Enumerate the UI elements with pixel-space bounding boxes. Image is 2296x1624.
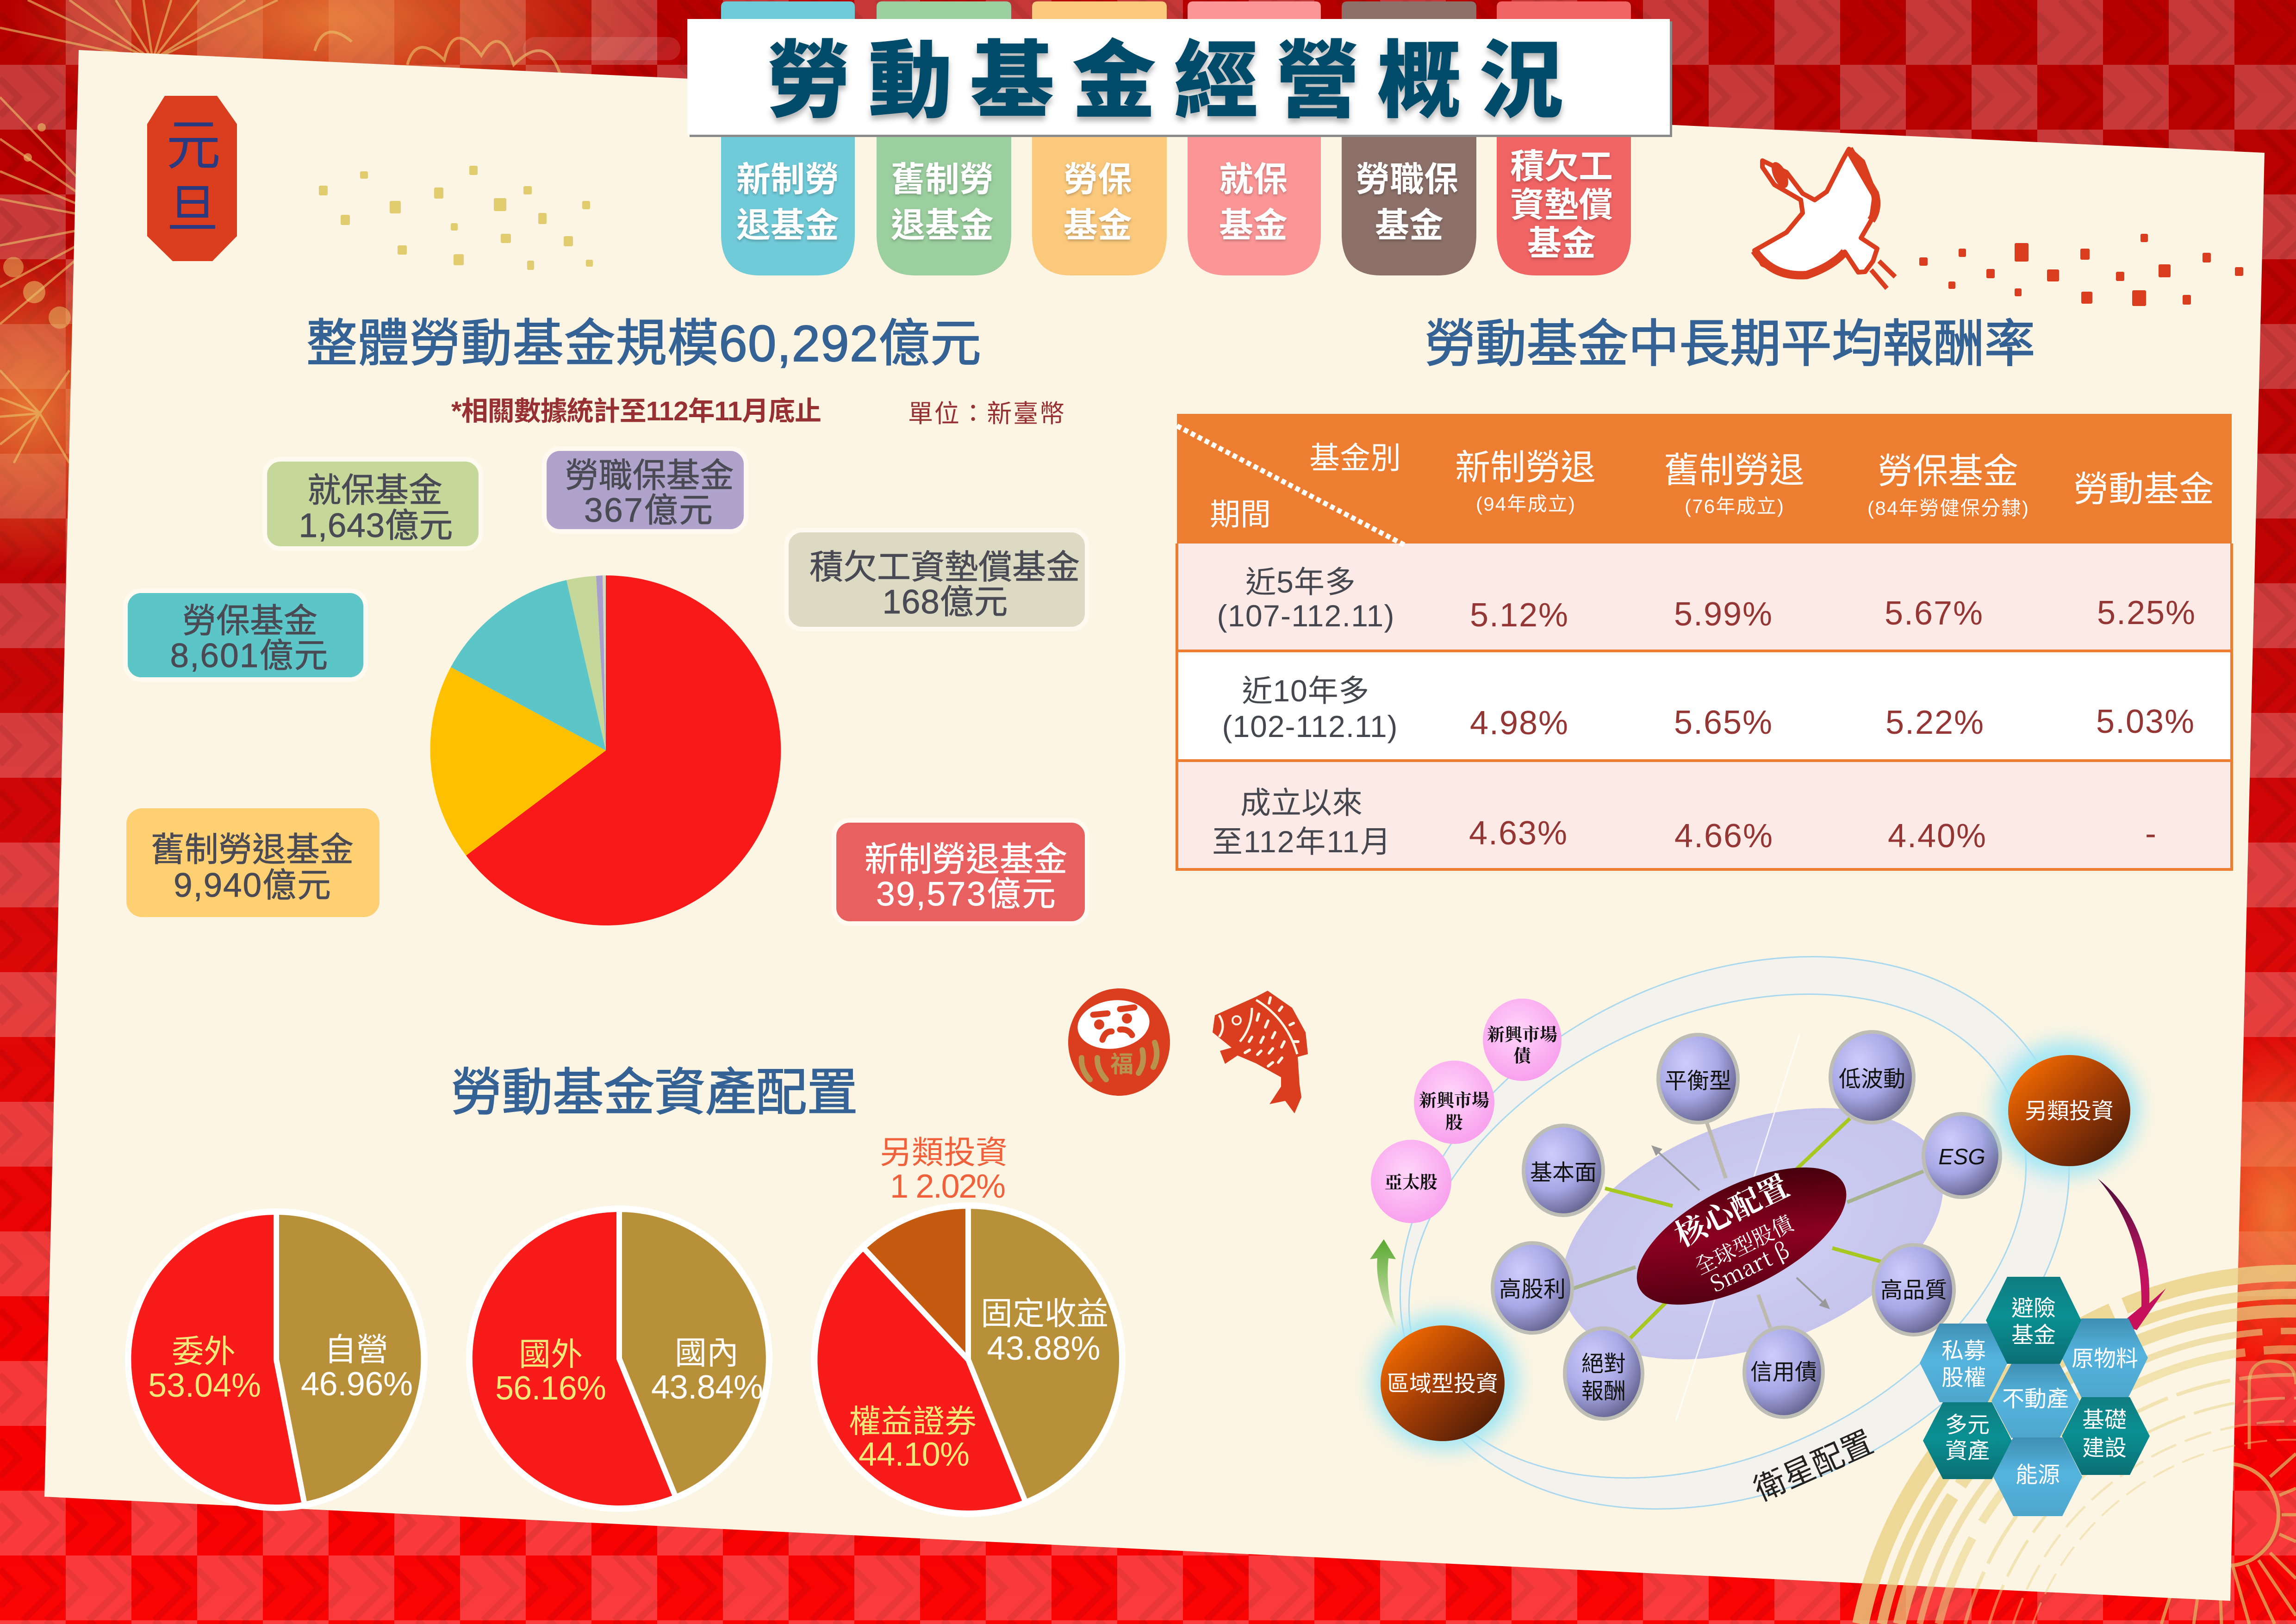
spheres: 基本面 [1530, 1154, 1597, 1187]
table: average returns: 5.03% [2096, 703, 2194, 740]
hexagon cluster: 資產 [1945, 1432, 1990, 1465]
core oval [1617, 1139, 1867, 1333]
satellite ring [1400, 956, 2069, 1509]
spheres: 高品質 [1880, 1272, 1947, 1304]
label: 勞職保基金 [544, 449, 746, 531]
table: average returns: 近5年多 [1245, 565, 1356, 599]
core oval: Smart β [1704, 1232, 1794, 1299]
heading: total fund size: 整體勞動基金規模60,292億元 [306, 315, 981, 372]
pie chart: asset classes: 43.88% [987, 1330, 1101, 1367]
table: average returns: - [2145, 815, 2156, 852]
hexagon cluster: 私募 [1941, 1332, 1986, 1365]
fund tabs: 新制勞 [736, 152, 839, 201]
red confetti [1919, 234, 2243, 306]
table: average returns: 新制勞退 [1455, 448, 1596, 487]
pie chart: 委外 / 自營 [125, 1208, 428, 1511]
table: average returns: 5.67% [1885, 595, 1983, 632]
core ellipse [1527, 1060, 1978, 1408]
fund tabs: 退基金 [891, 198, 994, 247]
note: data date: *相關數據統計至112年11月底止 [451, 396, 821, 426]
stamp: 元旦: 旦 [167, 167, 218, 242]
gold brush strokes [1860, 1273, 2296, 1624]
table: average returns: (94年成立) [1476, 493, 1575, 515]
pink regional circles: 新興市場 [1487, 1020, 1557, 1046]
icon: daruma: 福 [1110, 1046, 1133, 1079]
label: 勞保基金: 勞保基金 [182, 602, 317, 640]
label: alternative investment: 另類投資 [880, 1126, 1008, 1173]
table: average returns: 勞保基金 [1878, 452, 2018, 491]
fund tabs: 退基金 [736, 198, 839, 247]
spheres [1493, 1032, 2000, 1419]
label: 舊制勞退基金: 9,940億元 [174, 867, 331, 904]
fund tabs: 積欠工 [1510, 139, 1613, 188]
pie chart: asset classes [811, 1202, 1126, 1517]
table: average returns: (84年勞健保分隸) [1867, 497, 2028, 519]
pie chart: 國外 / 國內: 56.16% [495, 1370, 606, 1407]
fund tabs: 舊制勞 [891, 152, 994, 201]
orange ball: regional [1372, 1314, 1518, 1450]
pie chart: 國外 / 國內 [466, 1206, 772, 1512]
pie chart: asset classes: 權益證券 [849, 1395, 977, 1442]
stamp: 元旦: 元 [166, 101, 221, 180]
hexagon cluster: 股權 [1941, 1359, 1986, 1392]
hexagon cluster: 基金 [2011, 1317, 2056, 1349]
orange ball: regional: 區域型投資 [1387, 1365, 1498, 1398]
hexagon cluster [1920, 1277, 2150, 1516]
arrow: pink [2098, 1179, 2166, 1330]
label: 積欠工資墊償基金: 積欠工資墊償基金 [809, 549, 1080, 586]
orange ball: alternative [1995, 1042, 2138, 1176]
label: alternative investment: 1 2.02% [890, 1168, 1006, 1205]
pie chart: 委外 / 自營: 53.04% [148, 1367, 261, 1404]
table: average returns: 5.99% [1674, 596, 1772, 633]
pie chart: 委外 / 自營: 自營 [324, 1324, 388, 1370]
spheres: 高股利 [1499, 1271, 1566, 1303]
label: 勞保基金: 8,601億元 [170, 637, 328, 675]
table: average returns: 4.98% [1470, 705, 1568, 742]
icon: sea bream [1213, 991, 1308, 1113]
table: average returns: 5.65% [1674, 704, 1772, 741]
core oval: 核心配置 [1666, 1162, 1795, 1255]
table: average returns: 4.40% [1888, 818, 1986, 855]
hexagon cluster: 基礎 [2082, 1401, 2127, 1434]
spheres: 絕對 [1581, 1345, 1626, 1378]
hexagon cluster: 建設 [2082, 1430, 2127, 1462]
label: 舊制勞退基金: 舊制勞退基金 [151, 831, 354, 868]
pink regional circles: 亞太股 [1385, 1168, 1437, 1193]
label: 勞職保基金: 勞職保基金 [565, 457, 734, 494]
table: average returns: (76年成立) [1685, 495, 1784, 517]
label: 積欠工資墊償基金 [786, 530, 1087, 629]
fund tabs: 勞職保 [1356, 152, 1458, 201]
label: 就保基金 [265, 459, 481, 549]
pie chart: fund size [430, 575, 781, 925]
spheres: 報酬 [1581, 1373, 1626, 1405]
core oval: 全球型股債 [1689, 1206, 1799, 1281]
label: satellite allocation: 衛星配置 [1746, 1417, 1879, 1510]
pie chart: 委外 / 自營: 委外 [172, 1325, 236, 1372]
pie chart: 委外 / 自營: 46.96% [301, 1366, 413, 1403]
pink regional circles: 債 [1513, 1042, 1533, 1067]
label: 就保基金: 1,643億元 [299, 507, 453, 544]
fund tabs: 就保 [1219, 152, 1288, 201]
spheres: 平衡型 [1665, 1062, 1731, 1095]
pink regional circles: 新興市場 [1419, 1086, 1489, 1112]
heading: asset allocation: 勞動基金資產配置 [451, 1064, 858, 1121]
orange ball: alternative: 另類投資 [2025, 1093, 2114, 1125]
table: average returns: (102-112.11) [1222, 709, 1398, 743]
icon: crane [1755, 149, 1895, 288]
spheres: 低波動 [1839, 1061, 1905, 1093]
table: average returns [1177, 414, 2232, 869]
label: alternative investment [880, 1126, 1008, 1205]
label: 新制勞退基金 [834, 820, 1087, 924]
label: 積欠工資墊償基金: 168億元 [882, 583, 1008, 621]
hexagon cluster: 多元 [1945, 1406, 1990, 1439]
table: average returns: 4.63% [1469, 815, 1567, 852]
pie chart: 國外 / 國內: 國內 [675, 1327, 739, 1373]
pie chart: asset classes: 44.10% [859, 1436, 970, 1473]
table: average returns: 舊制勞退 [1664, 451, 1804, 490]
label: 就保基金: 就保基金 [307, 472, 442, 509]
table: average returns: 4.66% [1674, 818, 1773, 855]
label: 新制勞退基金: 39,573億元 [876, 875, 1056, 913]
table: average returns: 成立以來 [1240, 786, 1363, 820]
fund tabs: 基金 [1064, 198, 1132, 247]
table: average returns: (107-112.11) [1217, 599, 1394, 633]
pink regional circles: 股 [1445, 1108, 1463, 1134]
hexagon cluster: 不動產 [2002, 1380, 2069, 1413]
gold confetti [319, 166, 593, 270]
label: 勞職保基金: 367億元 [584, 492, 713, 529]
fund tabs: 基金 [1527, 216, 1596, 265]
table: average returns: 5.22% [1885, 704, 1984, 741]
stamp: 元旦 [147, 96, 237, 261]
pie chart: 國外 / 國內: 43.84% [651, 1369, 763, 1406]
table: average returns: 基金別 [1309, 441, 1401, 475]
fund tabs: 基金 [1375, 198, 1444, 247]
title banner: 勞動基金經營概況 [766, 13, 1581, 135]
label: 舊制勞退基金 [126, 808, 380, 917]
label: 新制勞退基金: 新制勞退基金 [865, 841, 1067, 878]
arrow: green [1370, 1239, 1400, 1334]
spheres: ESG [1938, 1145, 1985, 1169]
hexagon cluster: 能源 [2016, 1456, 2060, 1489]
pie chart: 國外 / 國內: 國外 [519, 1328, 583, 1374]
table: average returns: 至112年11月 [1212, 824, 1391, 859]
icon: daruma [1068, 988, 1170, 1096]
fund tabs: 基金 [1219, 198, 1288, 247]
hexagon cluster: 避險 [2011, 1290, 2056, 1322]
table: average returns: 近10年多 [1242, 674, 1369, 708]
table: average returns: 勞動基金 [2073, 470, 2214, 509]
hexagon cluster: 原物料 [2072, 1340, 2138, 1373]
diagram: core-satellite allocation [1370, 956, 2166, 1516]
table: average returns: 5.25% [2097, 594, 2195, 631]
note: unit: 單位：新臺幣 [908, 400, 1064, 428]
table: average returns: 5.12% [1470, 597, 1568, 634]
fund tabs [721, 1, 1631, 275]
spheres: 信用債 [1750, 1354, 1817, 1386]
fund tabs: 勞保 [1064, 152, 1132, 201]
label: 勞保基金 [125, 591, 366, 680]
heading: long-term return: 勞動基金中長期平均報酬率 [1425, 316, 2035, 373]
fund tabs: 資墊償 [1510, 177, 1613, 227]
pie chart: asset classes: 固定收益 [981, 1287, 1108, 1334]
table: average returns: 期間 [1210, 497, 1271, 531]
pink regional circles [1371, 999, 1562, 1223]
